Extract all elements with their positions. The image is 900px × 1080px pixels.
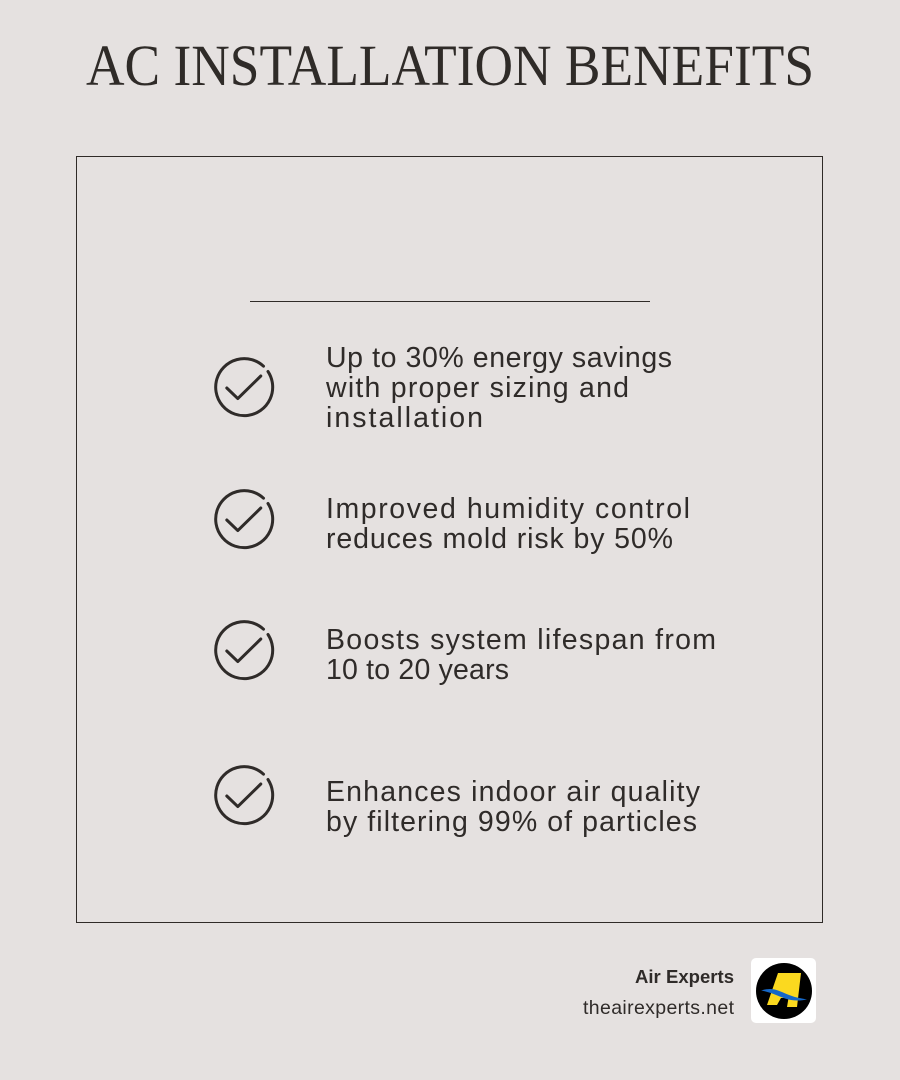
text: benefit 2: reduces mold risk by 50% (326, 523, 673, 555)
text: benefit 4: Enhances indoor air quality (326, 776, 701, 808)
text: benefit 1: installation (326, 402, 483, 434)
text: benefit 3: Boosts system lifespan from (326, 624, 716, 656)
icon: check circle 1 (216, 359, 273, 416)
icon: check circle 2 (216, 491, 273, 548)
panel: benefits frame (76, 156, 822, 922)
text: benefit 3: 10 to 20 years (326, 654, 509, 686)
text: benefit 1: with proper sizing and (325, 372, 629, 404)
icon: check circle 4 (216, 767, 273, 824)
footer: brand name: Air Experts (635, 966, 734, 987)
title: AC INSTALLATION BENEFITS (86, 33, 814, 98)
text: benefit 2 (326, 493, 690, 555)
text: benefit 1: Up to 30% energy savings (326, 342, 672, 374)
text: benefit 2: Improved humidity control (326, 493, 690, 525)
icon: check circle 3 (216, 622, 273, 679)
text: benefit 4: by filtering 99% of particles (326, 806, 697, 838)
text: benefit 1 (325, 342, 672, 434)
icon: Air Experts logo (751, 958, 816, 1023)
text: benefit 4 (326, 776, 701, 838)
text: benefit 3 (326, 624, 716, 686)
footer: website: theairexperts.net (583, 997, 735, 1019)
